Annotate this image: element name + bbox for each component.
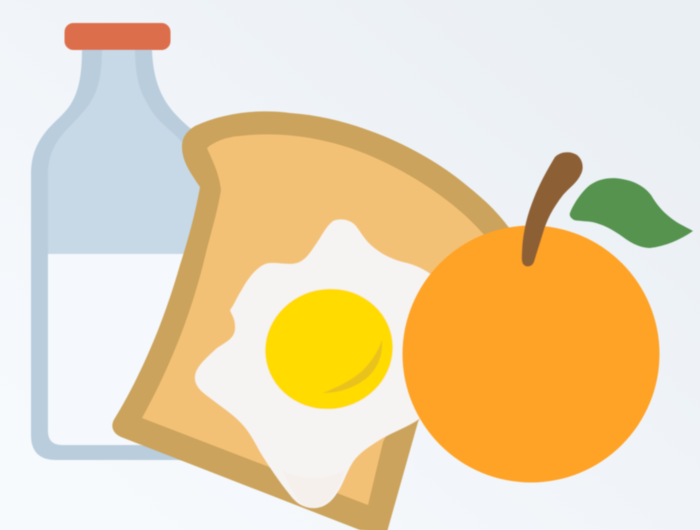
milk bbox=[48, 254, 200, 445]
orange leaf bbox=[570, 178, 693, 248]
icon: toast bbox=[112, 111, 512, 530]
toast crust bbox=[112, 111, 512, 530]
bottle glass outline bbox=[31, 48, 210, 460]
orange body bbox=[402, 226, 660, 482]
orange stem bbox=[522, 152, 583, 266]
bottle cap bbox=[64, 23, 170, 50]
egg white shadow bbox=[282, 470, 345, 508]
egg yolk bbox=[254, 277, 404, 421]
icon: orange bbox=[402, 152, 693, 482]
toast crumb bbox=[142, 134, 485, 505]
icon: milk bottle bbox=[31, 23, 210, 460]
egg white bbox=[195, 219, 450, 508]
yolk shadow bbox=[323, 340, 382, 393]
bottle empty interior bbox=[48, 48, 205, 254]
icon: fried egg bbox=[195, 219, 450, 508]
